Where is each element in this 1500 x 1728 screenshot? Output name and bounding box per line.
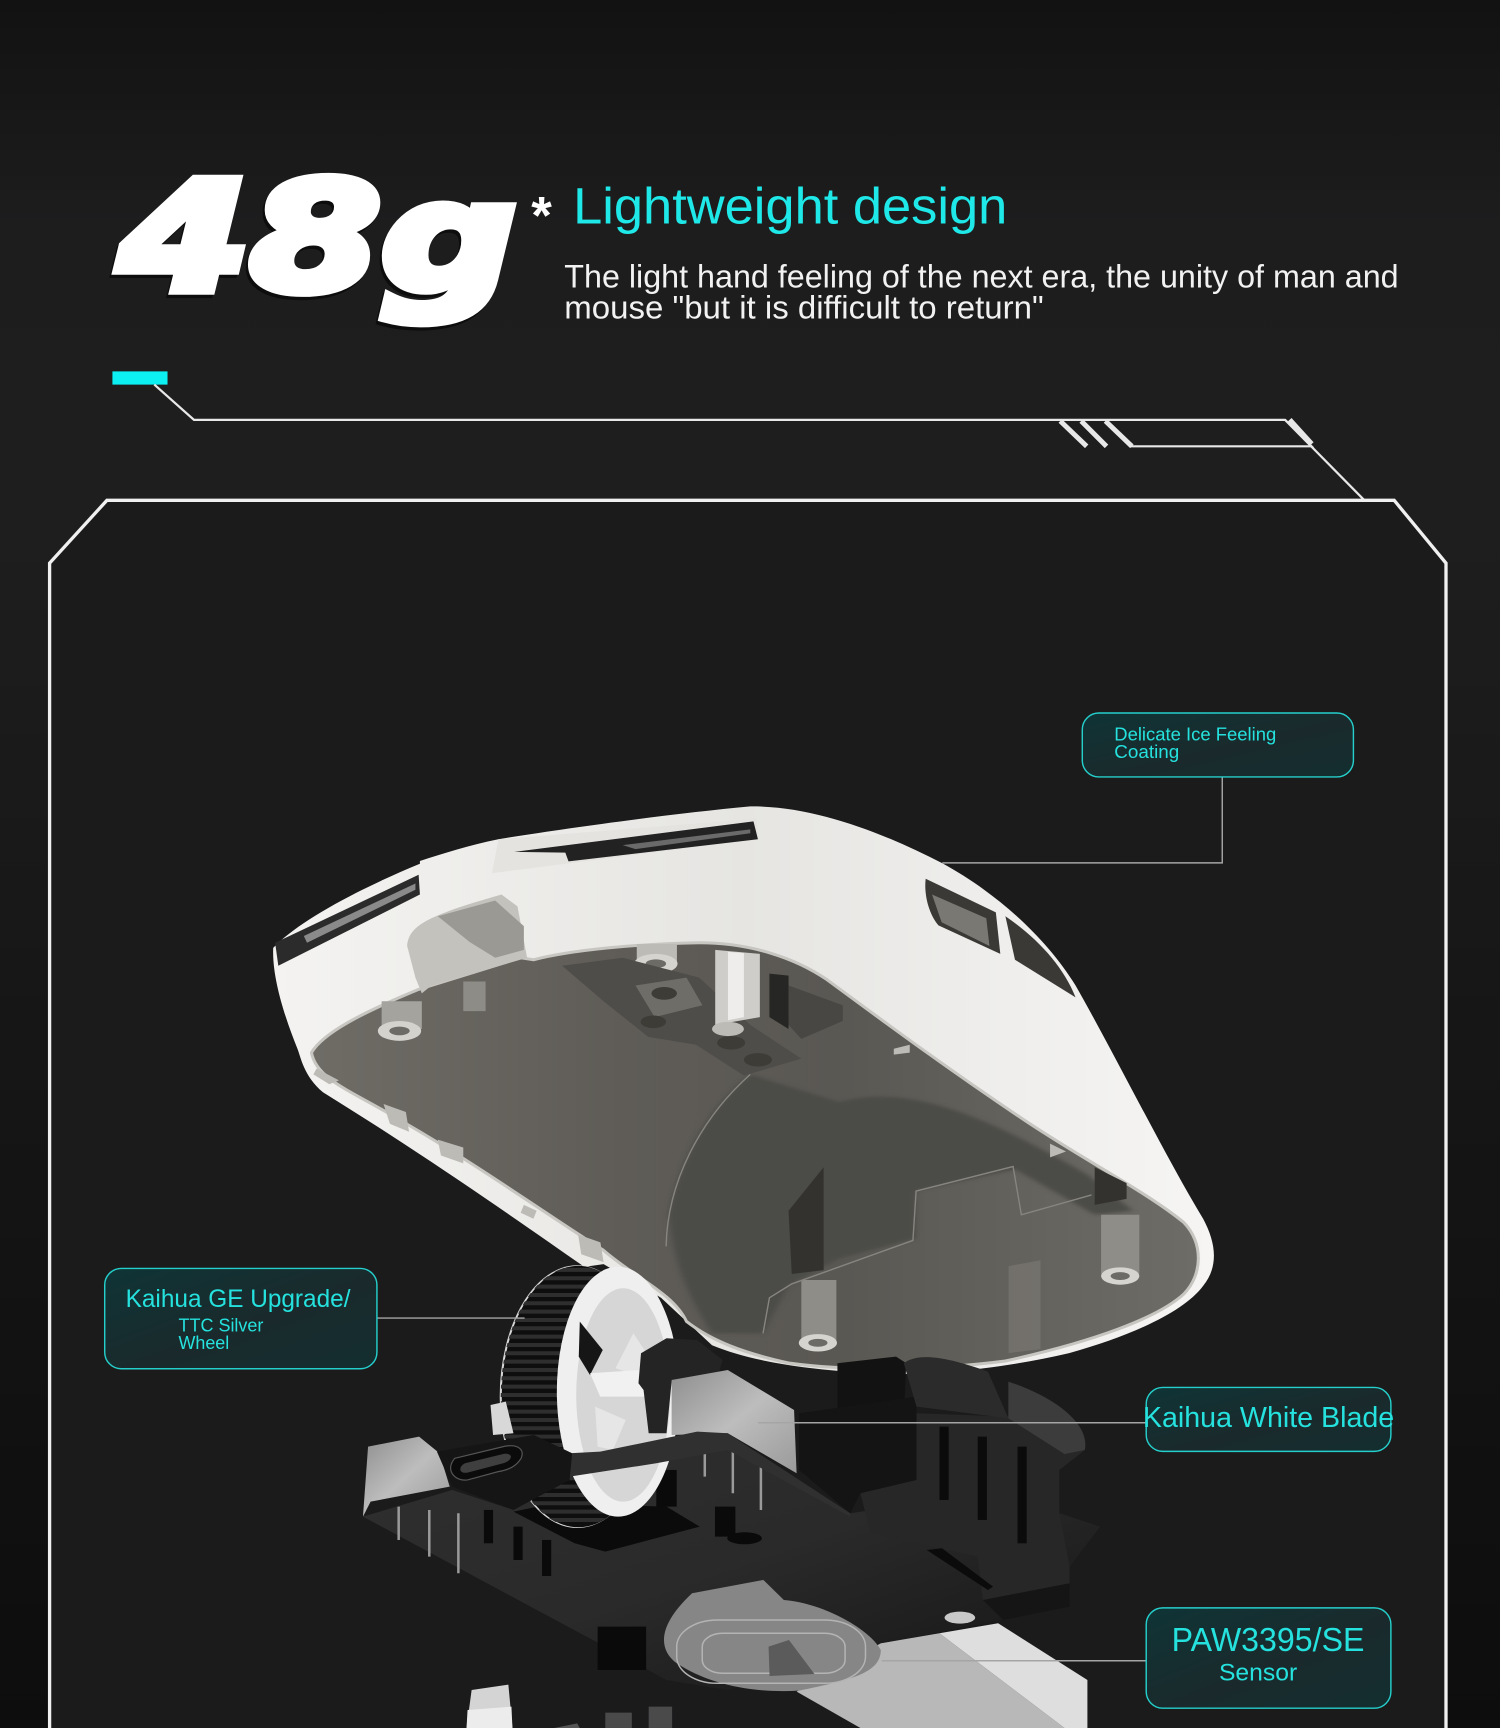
inner cavity [311,943,1198,1369]
description text: mouse "but it is difficult to return" [564,289,1044,325]
clear light pipe left [363,1437,450,1517]
board stud [945,1612,975,1624]
loose parts at bottom [467,1685,672,1728]
board edge strip [570,1432,850,1517]
notch [407,895,527,993]
internal assembly [363,1265,1100,1728]
sensor lens [664,1580,881,1691]
callout: coating [1082,713,1353,777]
callout: wheel [105,1268,377,1369]
wheel hub [491,1402,513,1435]
light guide bar [797,1623,1087,1728]
wheel disc [557,1267,679,1517]
interior posts [378,944,1139,1352]
upper wall [769,974,843,1039]
wheel openings [579,1322,603,1375]
circuit board [363,1437,1100,1690]
callout: wheel: TTC Silver [179,1314,263,1335]
callout: blade: Kaihua White Blade [1143,1402,1394,1434]
cyan accent bar [112,371,168,385]
tire ribs [493,1270,605,1520]
central mount block [562,950,801,1076]
interior slots [789,1167,1127,1353]
board slots [484,1470,762,1670]
description text: The light hand feeling of the next era, the unity of man and [564,259,1399,295]
leader lines [377,777,1222,1661]
callout: sensor: PAW3395/SE [1172,1622,1364,1659]
callout: blade [1143,1387,1394,1451]
right side openings [925,879,1076,997]
shell outer white body [273,806,1214,1374]
wheel bracket [638,1338,723,1433]
weight headline: 48g: 48g [118,150,516,326]
darker inner floor [669,1074,1133,1333]
decorative connector line [154,385,1364,500]
callout: coating: Coating [1114,741,1179,762]
mouse top shell [273,806,1214,1374]
panel frame [50,500,1446,1728]
description text [564,259,1399,325]
block slots [927,1427,1070,1620]
heading: Lightweight design: Lightweight design [573,178,1007,235]
callout: sensor [1146,1608,1391,1708]
asterisk: * [531,187,552,246]
switch block [799,1357,1085,1620]
clear light pipe right [672,1370,797,1473]
callout: wheel: Wheel [179,1332,229,1353]
board pins [399,1443,761,1573]
middle slit [492,819,758,873]
side buttons [904,1357,1008,1418]
notch recess [438,900,524,958]
rim tabs [313,1045,1066,1262]
callout: coating: Delicate Ice Feeling [1114,724,1276,745]
USB connector [437,1435,572,1510]
scroll wheel [491,1265,679,1528]
callout: sensor: Sensor [1219,1660,1297,1687]
weight headline: 48g: 48g [116,153,514,329]
interior ridge lines [666,1074,1092,1333]
callout: wheel: Kaihua GE Upgrade/ [126,1285,351,1313]
left slit [275,875,420,966]
